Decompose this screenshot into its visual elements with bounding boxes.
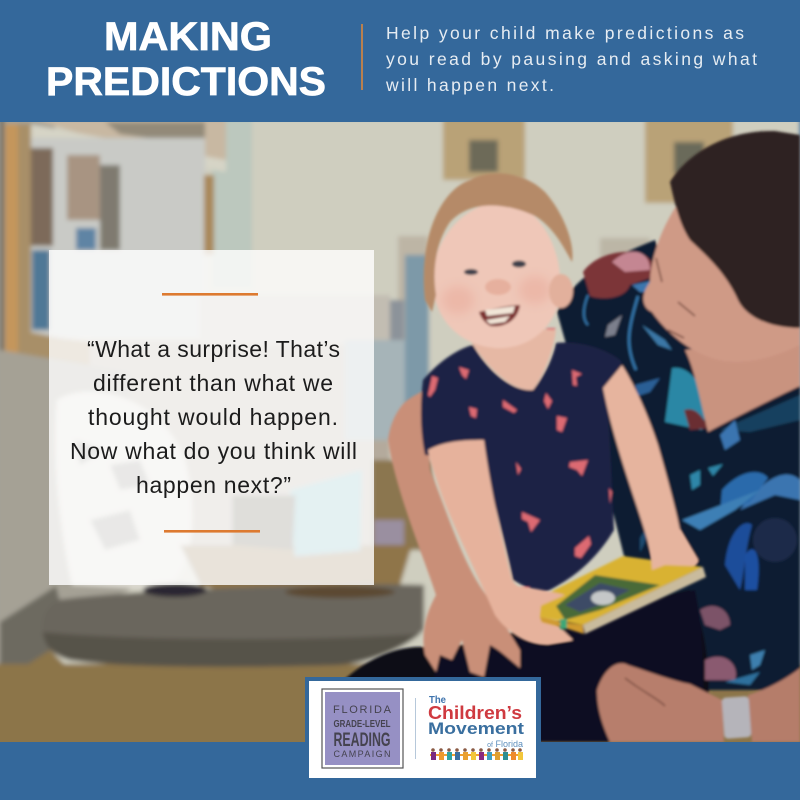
- quote text: “What a surprise! That’s: [87, 336, 340, 362]
- paper-doll row: [430, 748, 523, 760]
- floral pillow behind the panel: [55, 392, 192, 590]
- child's ears: [549, 274, 573, 308]
- logo: Florida Grade-Level Reading Campaign: READING: [334, 730, 390, 751]
- bottom orange bar: [164, 530, 260, 533]
- mother's hand and wrist: [597, 663, 724, 742]
- logo: Florida Grade-Level Reading Campaign: GRADE-LEVEL: [334, 718, 391, 730]
- blurred classroom background: [0, 118, 800, 754]
- quote text: thought would happen.: [88, 404, 338, 430]
- logo: The Children's Movement of Florida: of Florida: [487, 739, 523, 749]
- child's hair: [424, 173, 573, 312]
- mother's neck and chest: [685, 335, 800, 432]
- dress floral pattern: [583, 252, 800, 685]
- header: description: [385, 23, 757, 95]
- logo divider: [415, 698, 416, 759]
- quote text: Now what do you think will: [70, 438, 357, 464]
- mother's face: [643, 205, 800, 362]
- quote text: happen next?”: [136, 472, 291, 498]
- logo: The Children's Movement of Florida: Children’s: [428, 703, 522, 723]
- quote text: [70, 336, 357, 498]
- logo: Florida Grade-Level Reading Campaign: CAMPAIGN: [334, 749, 390, 759]
- header: title: PREDICTIONS: [46, 60, 326, 104]
- grey floor cushion: [52, 582, 427, 643]
- logo: Florida Grade-Level Reading Campaign: [322, 689, 403, 768]
- quote text: different than what we: [93, 370, 333, 396]
- mother's arm behind child: [388, 390, 520, 677]
- mother's facial features: [656, 258, 695, 338]
- header: title: MAKING: [104, 15, 272, 59]
- photo: child and mother reading: [0, 118, 800, 754]
- picture book: [492, 530, 706, 644]
- logo card: [305, 677, 541, 800]
- child's shirt: [421, 342, 622, 595]
- logo: Florida Grade-Level Reading Campaign: FLORIDA: [333, 704, 392, 716]
- child's arm on right with hand: [603, 365, 698, 568]
- shirt lobster prints: [428, 328, 612, 591]
- logo: The Children's Movement of Florida: Movement: [428, 719, 524, 738]
- header: description: will happen next.: [385, 75, 554, 95]
- header: description: Help your child make predictions as: [386, 23, 744, 43]
- header: description: you read by pausing and asking what: [386, 49, 757, 69]
- child's eyes: [464, 260, 526, 275]
- top orange bar: [162, 293, 258, 296]
- logo: The Children's Movement of Florida: [428, 694, 524, 760]
- quote panel: [49, 250, 374, 585]
- header: vertical divider: [361, 24, 363, 90]
- child's smile: [479, 305, 520, 326]
- child's arm on left: [428, 440, 573, 644]
- child's fingers over book: [650, 530, 698, 570]
- logo: The Children's Movement of Florida: The: [429, 694, 446, 706]
- mother's dress and lap: [330, 131, 800, 742]
- child's cheeks: [442, 276, 551, 314]
- child's neck and face: [470, 325, 556, 390]
- header: title: [46, 15, 326, 104]
- watch: [722, 696, 751, 739]
- child's nose: [485, 279, 511, 295]
- mother's hair: [670, 131, 800, 328]
